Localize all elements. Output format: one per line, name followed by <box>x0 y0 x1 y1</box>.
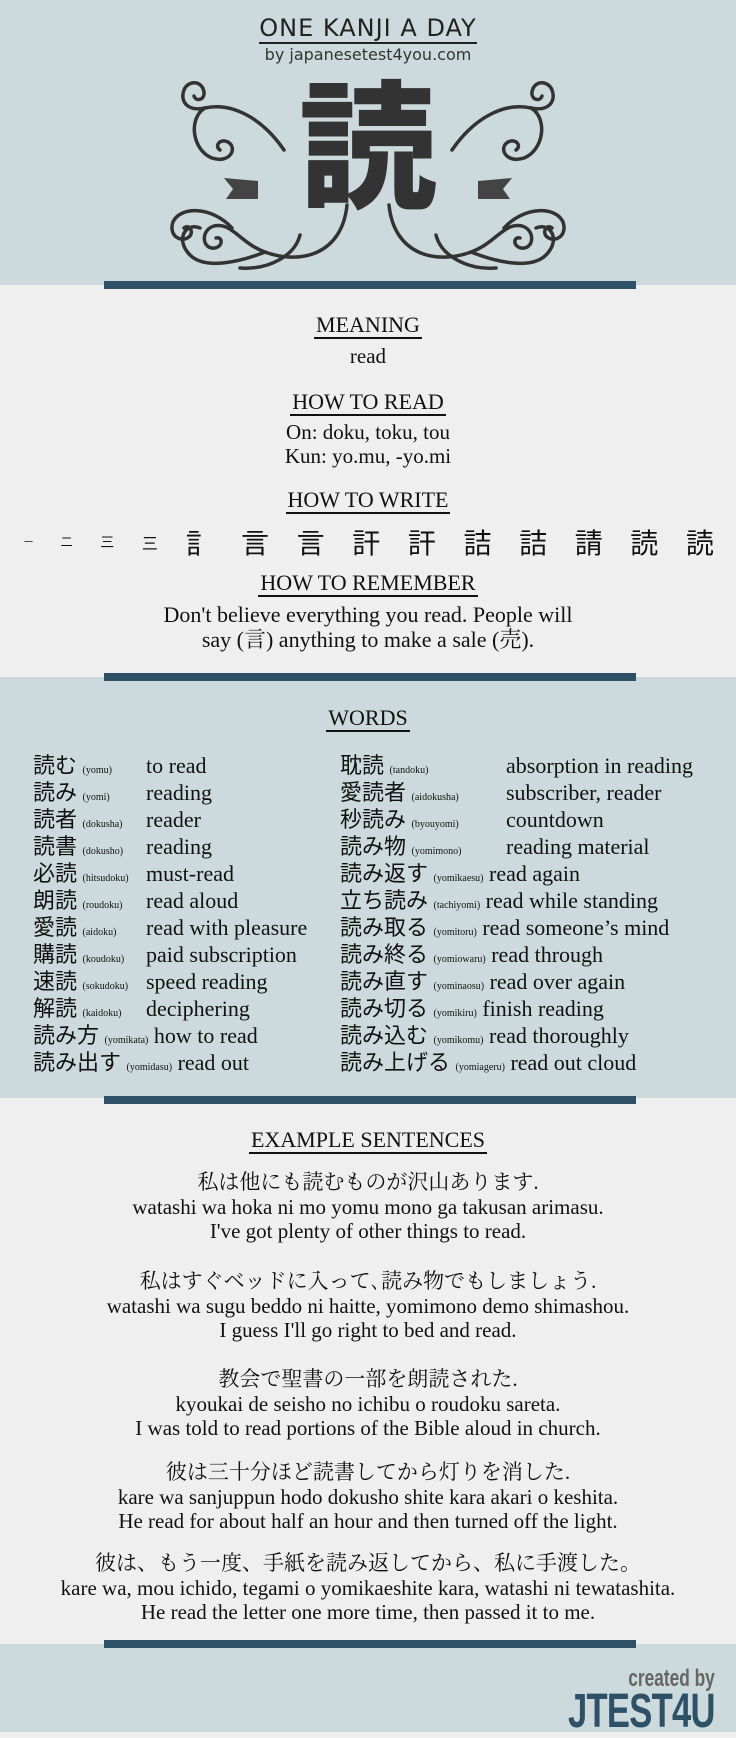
words list: 立ち読み (tachiyomi) read while standing <box>340 888 658 913</box>
words list: 読み込む (yomikomu) read thoroughly <box>340 1023 629 1048</box>
text: 私はすぐベッドに入って､読み物でもしましょう. <box>140 1269 596 1293</box>
words list: countdown <box>506 807 604 832</box>
text: Kun: yo.mu, -yo.mi <box>285 444 451 468</box>
sentences: watashi wa hoka ni mo yomu mono ga takusan arimasu. <box>132 1194 604 1218</box>
text: Don't believe everything you read. People will <box>163 602 573 627</box>
words list: reader <box>146 807 201 832</box>
text: He read the letter one more time, then passed it to me. <box>141 1600 595 1624</box>
words list: 必読 (hitsudoku) <box>33 861 129 886</box>
text: say (言) anything to make a sale (売). <box>202 627 534 652</box>
words list: 愛読 (aidoku) <box>33 915 116 940</box>
example sentences heading: EXAMPLE SENTENCES <box>251 1127 485 1152</box>
text: read <box>350 344 386 368</box>
words list: subscriber, reader <box>506 780 661 805</box>
text: I was told to read portions of the Bible aloud in church. <box>135 1416 601 1440</box>
words list: 読書 (dokusho) <box>33 834 123 859</box>
words list: 朗読 (roudoku) <box>33 888 123 913</box>
title: ONE KANJI A DAY <box>259 14 477 42</box>
stroke order: 二 <box>61 533 73 550</box>
words list: 読み返す (yomikaesu) read again <box>340 861 580 886</box>
words list: 耽読 (tandoku) <box>340 753 428 778</box>
text: 彼は三十分ほど読書してから灯りを消した. <box>166 1460 570 1484</box>
ornament swirls <box>170 81 566 270</box>
stroke order: 詰 <box>519 522 547 562</box>
stroke order: 言 <box>241 522 269 562</box>
stroke order: 請 <box>575 522 603 562</box>
stroke order: 訐 <box>408 522 436 562</box>
meaning: MEANING <box>316 312 420 337</box>
words list: 読み方 (yomikata) how to read <box>33 1023 258 1048</box>
logo: JTEST4U <box>568 1685 715 1738</box>
text: 教会で聖書の一部を朗読された. <box>218 1367 518 1391</box>
words list: 読み取る (yomitoru) read someone’s mind <box>340 915 669 940</box>
words list: 解読 (kaidoku) <box>33 996 121 1021</box>
words list: 速読 (sokudoku) <box>33 969 128 994</box>
words list <box>33 753 693 1075</box>
stroke order <box>24 522 714 562</box>
words list: paid subscription <box>146 942 297 967</box>
text: On: doku, toku, tou <box>286 420 450 444</box>
how to read: HOW TO READ <box>292 389 444 414</box>
logo: created by <box>629 1665 715 1692</box>
words list: read aloud <box>146 888 238 913</box>
text: kare wa, mou ichido, tegami o yomikaeshite kara, watashi ni tewatashita. <box>61 1576 675 1600</box>
words list: 読み終る (yomiowaru) read through <box>340 942 603 967</box>
words list: 秒読み (byouyomi) <box>340 807 459 832</box>
stroke order: 言 <box>297 522 325 562</box>
stroke order: 三 <box>100 532 114 552</box>
text: I guess I'll go right to bed and read. <box>219 1318 517 1342</box>
text: kyoukai de seisho no ichibu o roudoku sareta. <box>176 1392 560 1416</box>
words list: to read <box>146 753 206 778</box>
words list: 読み上げる (yomiageru) read out cloud <box>340 1050 636 1075</box>
stroke order: 読 <box>630 522 658 562</box>
words list: 読者 (dokusha) <box>33 807 123 832</box>
stroke order: 訁 <box>185 522 213 562</box>
words list: reading material <box>506 834 650 859</box>
words list: absorption in reading <box>506 753 693 778</box>
text: 彼は、もう一度、手紙を読み返してから、私に手渡した。 <box>95 1551 641 1575</box>
words list: 購読 (koudoku) <box>33 942 124 967</box>
stroke order: 一 <box>24 535 33 548</box>
words list: speed reading <box>146 969 268 994</box>
stroke order: 詰 <box>463 522 491 562</box>
sentences: 私は他にも読むものが沢山あります. <box>197 1170 539 1194</box>
icon: ribbon <box>224 178 258 199</box>
words list: 読み物 (yomimono) <box>340 834 462 859</box>
how to write: HOW TO WRITE <box>288 487 448 512</box>
words list: deciphering <box>146 996 250 1021</box>
subtitle: by japanesetest4you.com <box>265 45 471 64</box>
text: watashi wa sugu beddo ni haitte, yomimono demo shimashou. <box>107 1294 629 1318</box>
words list: reading <box>146 780 212 805</box>
sentences: I've got plenty of other things to read. <box>210 1219 526 1243</box>
words list: 読み出す (yomidasu) read out <box>33 1050 249 1075</box>
text: He read for about half an hour and then turned off the light. <box>118 1509 618 1533</box>
words list: 読み直す (yominaosu) read over again <box>340 969 625 994</box>
how to remember: HOW TO REMEMBER <box>260 570 476 595</box>
stroke order: 訐 <box>352 522 380 562</box>
words list: 愛読者 (aidokusha) <box>340 780 459 805</box>
words list: 読み切る (yomikiru) finish reading <box>340 996 604 1021</box>
words heading: WORDS <box>328 705 408 730</box>
sentences <box>132 1170 604 1243</box>
text: kare wa sanjuppun hodo dokusho shite kara akari o keshita. <box>118 1484 618 1508</box>
words list: 読み (yomi) <box>33 780 110 805</box>
stroke order: 三 <box>142 530 158 554</box>
words list: reading <box>146 834 212 859</box>
words list: read with pleasure <box>146 915 307 940</box>
words list: must-read <box>146 861 234 886</box>
words list: 読む (yomu) <box>33 753 112 778</box>
big kanji: 読 <box>299 37 437 237</box>
stroke order: 読 <box>686 522 714 562</box>
